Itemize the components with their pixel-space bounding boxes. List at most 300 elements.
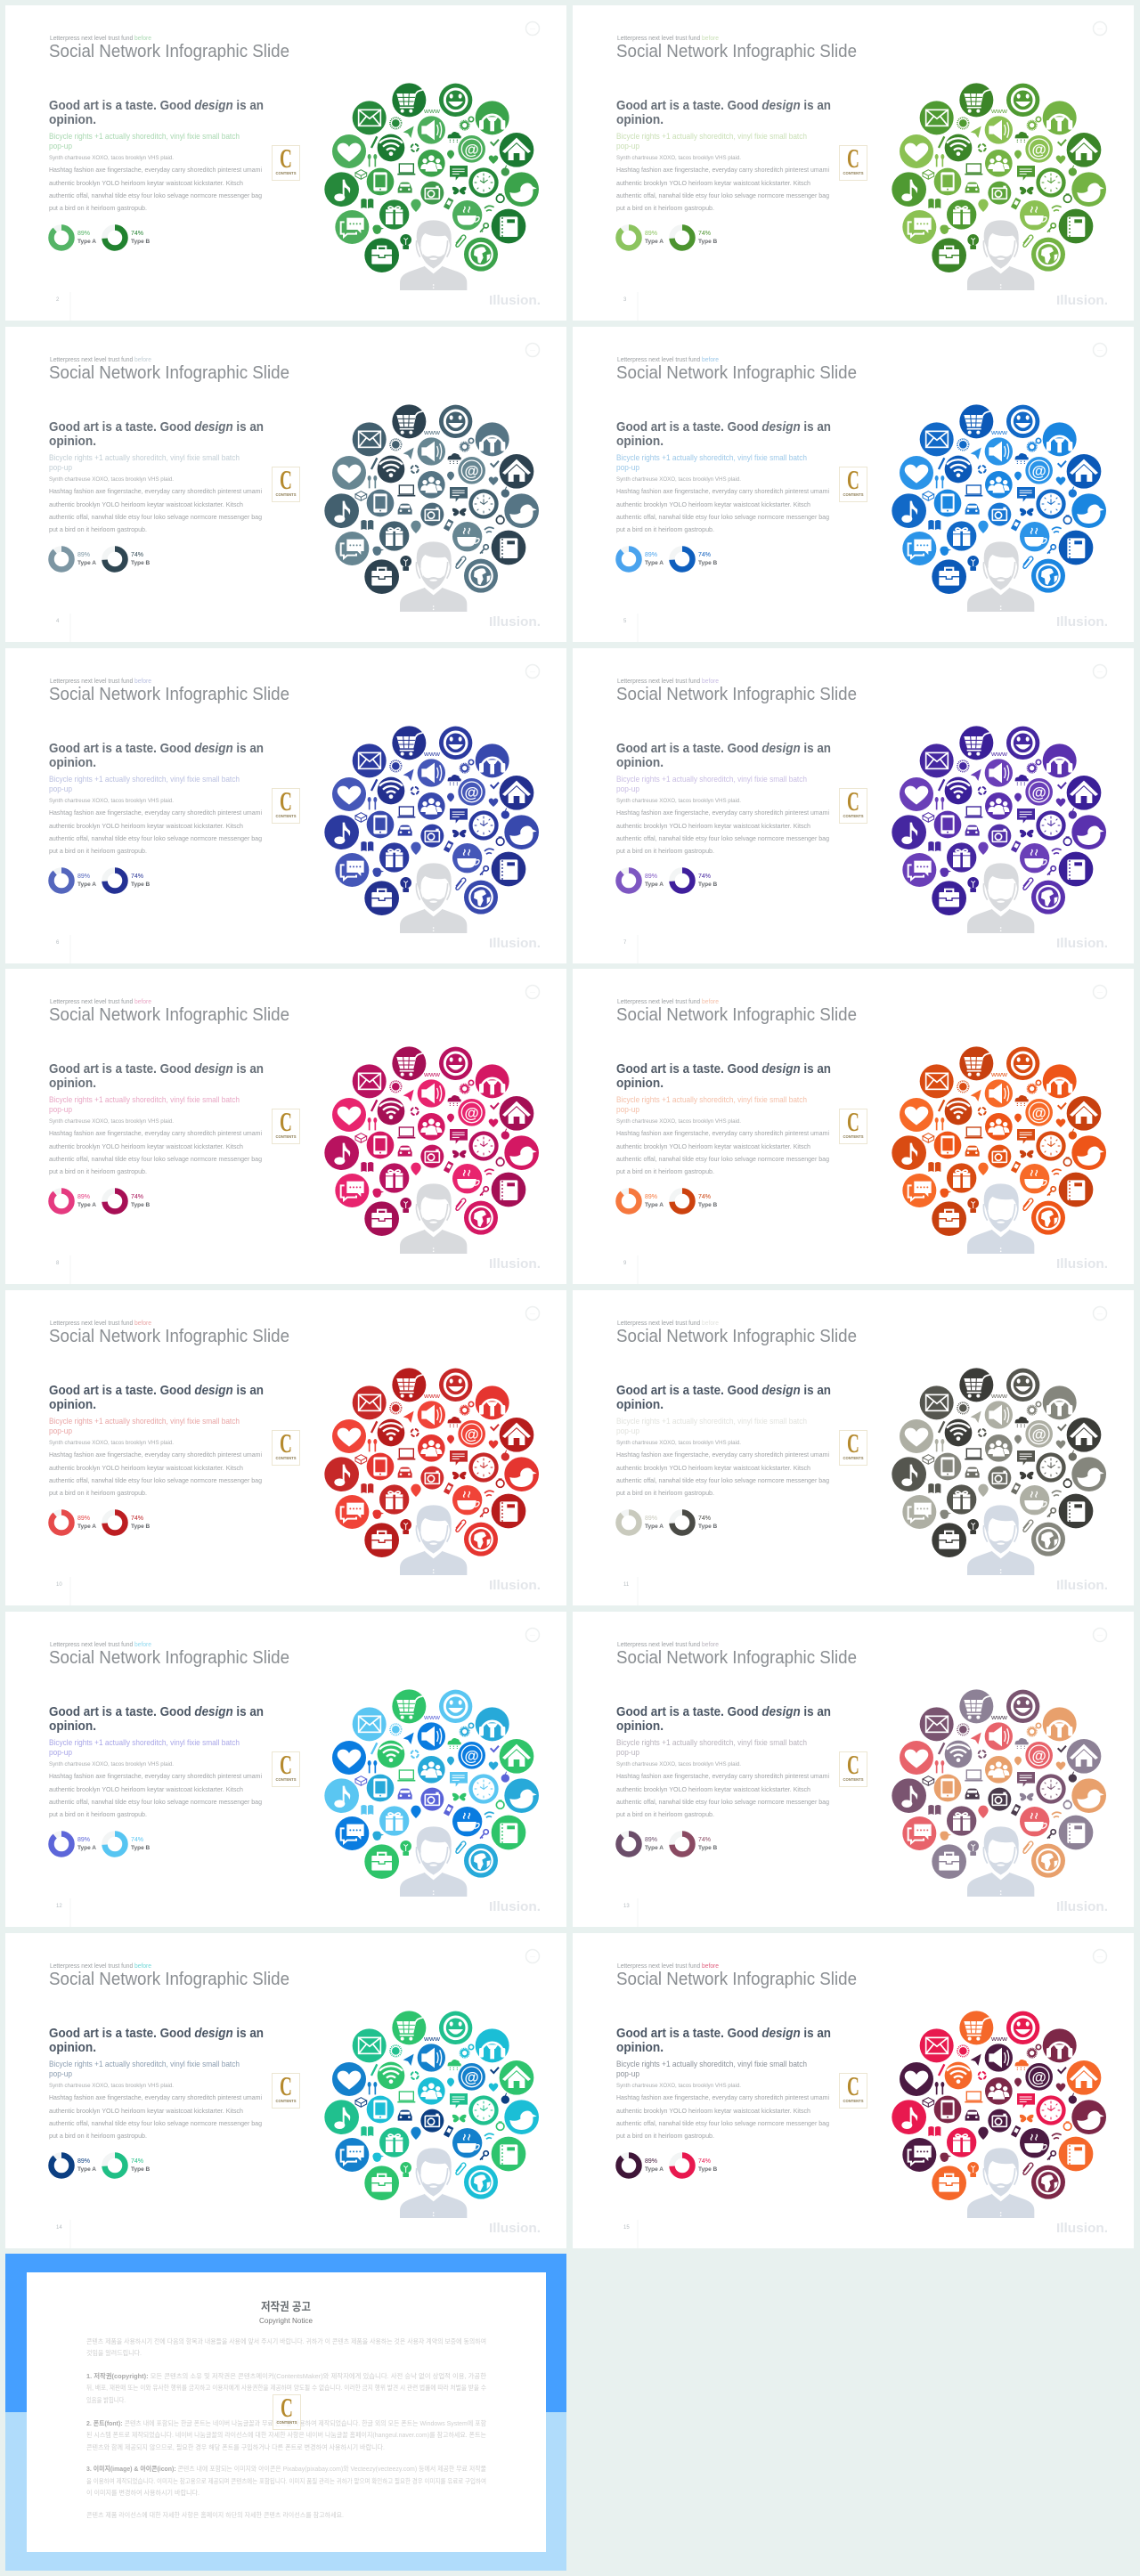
donut chart: Type A 89% xyxy=(618,2155,664,2176)
body text: Hashtag fashion axe fingerstache, everyday carry shoreditch pinterest umami xyxy=(49,166,262,174)
heading xyxy=(49,419,264,449)
heading: opinion. xyxy=(616,112,664,127)
donut chart: Type A 89%: Type A xyxy=(645,560,664,566)
heading xyxy=(616,98,831,127)
speech bubble icon xyxy=(1094,344,1106,356)
donut chart: Type A 89%: Type A xyxy=(77,882,96,888)
contents stamp: C xyxy=(847,1106,859,1137)
coloured subheading: Bicycle rights +1 actually shoreditch, vinyl fixie small batch xyxy=(616,1095,807,1105)
page number: 13 xyxy=(623,1904,630,1909)
heading: Good art is a taste. Good design is an xyxy=(616,2026,831,2041)
brand wordmark: Illusion. xyxy=(1056,1256,1108,1272)
intro paragraph: 것임을 알려드립니다. xyxy=(86,2348,142,2357)
speech bubble icon: ··· xyxy=(530,1954,535,1960)
heading: Good art is a taste. Good design is an xyxy=(616,1383,831,1398)
paragraph: image and icon xyxy=(86,2464,486,2497)
body text xyxy=(616,155,829,212)
contents stamp: CONTENTS xyxy=(275,492,297,497)
body text: put a bird on it heirloom gastropub. xyxy=(616,847,714,855)
page number: 7 xyxy=(623,940,627,946)
body text xyxy=(616,476,829,533)
heading xyxy=(49,1061,264,1091)
coloured subheading: Bicycle rights +1 actually shoreditch, vinyl fixie small batch xyxy=(616,1738,807,1748)
donut chart: Type A 89% xyxy=(618,1512,664,1533)
body text: authentic offal, narwhal tilde etsy four loko selvage normcore messenger bag xyxy=(616,834,829,842)
contents stamp: C xyxy=(280,142,292,174)
title: Social Network Infographic Slide xyxy=(49,1005,289,1025)
coloured subheading: Bicycle rights +1 actually shoreditch, vinyl fixie small batch xyxy=(49,1095,240,1105)
donut chart: Type B 74%: Type B xyxy=(698,1524,717,1530)
donut chart: Type B 74%: Type B xyxy=(698,560,717,566)
speech bubble icon: ··· xyxy=(1097,348,1103,353)
donut chart: Type A 89% xyxy=(52,1512,96,1533)
coloured subheading: pop-up xyxy=(49,463,72,473)
speech bubble icon: ··· xyxy=(1097,1954,1103,1960)
heading xyxy=(49,1383,264,1412)
heading: opinion. xyxy=(616,1397,664,1412)
speech bubble icon: ··· xyxy=(530,27,535,32)
slide panel 3: lime xyxy=(573,5,1134,321)
speech bubble icon: ··· xyxy=(530,1312,535,1317)
coloured subheading: Bicycle rights +1 actually shoreditch, vinyl fixie small batch xyxy=(616,1417,807,1426)
donut chart: Type A 89%: 89% xyxy=(645,1837,657,1843)
social icon cluster xyxy=(892,404,1106,612)
donut chart: Type B 74% xyxy=(672,871,717,890)
donut chart: Type A 89%: 89% xyxy=(645,1516,657,1522)
page number: 5 xyxy=(623,619,627,624)
body text xyxy=(616,1118,829,1175)
title: Social Network Infographic Slide xyxy=(616,1005,857,1025)
coloured subheading xyxy=(616,2060,807,2079)
intro paragraph xyxy=(86,2336,486,2357)
donut chart: Type B 74%: 74% xyxy=(131,874,143,880)
donut chart: Type A 89% xyxy=(52,1834,96,1854)
body text: Synth chartreuse XOXO, tacos brooklyn VHS plaid. xyxy=(49,798,174,804)
donut chart: Type A 89%: Type A xyxy=(77,1524,96,1530)
heading: opinion. xyxy=(49,112,96,127)
page number: 9 xyxy=(623,1261,627,1266)
body text: Synth chartreuse XOXO, tacos brooklyn VHS plaid. xyxy=(49,155,174,161)
notice title: 저작권 공고 xyxy=(261,2300,311,2313)
body text: authentic offal, narwhal tilde etsy four loko selvage normcore messenger bag xyxy=(49,1798,262,1806)
brand wordmark: Illusion. xyxy=(1056,1578,1108,1593)
heading: opinion. xyxy=(616,434,664,449)
body text: Synth chartreuse XOXO, tacos brooklyn VHS plaid. xyxy=(616,1440,741,1446)
heading: opinion. xyxy=(49,1397,96,1412)
contents stamp xyxy=(839,2070,867,2109)
contents stamp xyxy=(273,2070,299,2109)
donut chart: Type A 89%: 89% xyxy=(77,1194,90,1200)
body text xyxy=(616,2083,829,2140)
coloured subheading: Bicycle rights +1 actually shoreditch, vinyl fixie small batch xyxy=(616,453,807,463)
donut chart: Type B 74% xyxy=(105,1512,150,1533)
heading: Good art is a taste. Good design is an xyxy=(616,419,831,435)
body text: Hashtag fashion axe fingerstache, everyday carry shoreditch pinterest umami xyxy=(49,2093,262,2101)
page number: 15 xyxy=(623,2225,630,2231)
paragraph: image and icon: 3. 이미지(image) & 아이콘(icon): 콘텐츠 내에 포함되는 이미지와 아이콘은 Pixabay(pixabay.com)와 Vecteezy(vecteezy.com) 등에서 제공한 무료 저작물 xyxy=(86,2464,486,2473)
donut chart: Type B 74% xyxy=(672,1191,717,1211)
title: Social Network Infographic Slide xyxy=(49,1327,289,1346)
donut chart: Type B 74% xyxy=(105,1834,150,1854)
contents stamp: CONTENTS xyxy=(843,1456,864,1460)
page number: 12 xyxy=(56,1904,62,1909)
slide panel 2: green xyxy=(5,5,566,321)
contents stamp: C xyxy=(847,1749,859,1780)
speech bubble icon xyxy=(1094,664,1106,679)
donut chart: Type B 74% xyxy=(672,549,717,570)
coloured subheading: pop-up xyxy=(49,784,72,794)
heading: opinion. xyxy=(49,755,96,770)
heading: opinion. xyxy=(49,1076,96,1091)
heading xyxy=(49,741,264,770)
brand wordmark: Illusion. xyxy=(1056,2221,1108,2236)
coloured subheading: pop-up xyxy=(616,1748,639,1758)
body text: authentic brooklyn YOLO heirloom keytar waistcoat kickstarter. Kitsch xyxy=(49,2107,243,2115)
body text: authentic brooklyn YOLO heirloom keytar waistcoat kickstarter. Kitsch xyxy=(49,822,243,830)
donut chart: Type B 74%: Type B xyxy=(131,882,150,888)
body text xyxy=(49,155,262,212)
body text: authentic brooklyn YOLO heirloom keytar waistcoat kickstarter. Kitsch xyxy=(616,500,810,508)
coloured subheading: Bicycle rights +1 actually shoreditch, vinyl fixie small batch xyxy=(49,1738,240,1748)
body text: Hashtag fashion axe fingerstache, everyday carry shoreditch pinterest umami xyxy=(616,2093,829,2101)
coloured subheading: Bicycle rights +1 actually shoreditch, vinyl fixie small batch xyxy=(616,132,807,142)
donut chart: Type B 74% xyxy=(672,228,717,248)
coloured subheading: Bicycle rights +1 actually shoreditch, vinyl fixie small batch xyxy=(49,453,240,463)
paragraph: font: 된 시스템 폰트로 제작되었습니다. 네이버 나눔글꼴의 라이선스에 대한 자세한 사항은 네이버 나눔글꼴 홈페이지(hangeul.naver.com)를 참고하세요. 폰트는 xyxy=(86,2430,486,2439)
coloured subheading: Bicycle rights +1 actually shoreditch, vinyl fixie small batch xyxy=(49,775,240,784)
title: Social Network Infographic Slide xyxy=(49,42,289,61)
body text: authentic brooklyn YOLO heirloom keytar waistcoat kickstarter. Kitsch xyxy=(49,500,243,508)
body text: put a bird on it heirloom gastropub. xyxy=(49,1810,147,1818)
speech bubble icon xyxy=(1094,1628,1106,1642)
paragraph: font xyxy=(86,2418,486,2451)
donut chart: Type A 89%: Type A xyxy=(645,882,664,888)
coloured subheading xyxy=(616,453,807,473)
social icon cluster xyxy=(892,1046,1106,1254)
body text: authentic brooklyn YOLO heirloom keytar waistcoat kickstarter. Kitsch xyxy=(49,1464,243,1472)
body text xyxy=(49,2083,262,2140)
eyebrow text: Letterpress next level trust fund before xyxy=(50,1640,151,1648)
donut chart: Type B 74%: Type B xyxy=(698,882,717,888)
heading: opinion. xyxy=(616,1719,664,1734)
heading xyxy=(616,1383,831,1412)
speech bubble icon xyxy=(1094,1307,1106,1320)
heading: Good art is a taste. Good design is an xyxy=(616,1061,831,1077)
coloured subheading: Bicycle rights +1 actually shoreditch, vinyl fixie small batch xyxy=(49,1417,240,1426)
body text: authentic offal, narwhal tilde etsy four loko selvage normcore messenger bag xyxy=(616,513,829,521)
brand wordmark: Illusion. xyxy=(1056,1899,1108,1914)
contents stamp xyxy=(273,464,299,502)
coloured subheading: Bicycle rights +1 actually shoreditch, vinyl fixie small batch xyxy=(49,132,240,142)
body text: authentic offal, narwhal tilde etsy four loko selvage normcore messenger bag xyxy=(616,1155,829,1163)
body text: Synth chartreuse XOXO, tacos brooklyn VHS plaid. xyxy=(616,1761,741,1767)
speech bubble icon: ··· xyxy=(1097,1312,1103,1317)
brand wordmark: Illusion. xyxy=(1056,293,1108,308)
donut chart: Type B 74%: Type B xyxy=(131,1845,150,1851)
social icon cluster xyxy=(324,1046,539,1254)
contents stamp: CONTENTS xyxy=(843,492,864,497)
body text: Synth chartreuse XOXO, tacos brooklyn VHS plaid. xyxy=(49,1118,174,1125)
contents stamp: CONTENTS xyxy=(276,2420,297,2425)
coloured subheading xyxy=(49,1417,240,1436)
speech bubble icon: ··· xyxy=(530,990,535,995)
eyebrow text: Letterpress next level trust fund before xyxy=(617,355,719,363)
donut chart: Type B 74% xyxy=(672,2155,717,2176)
coloured subheading xyxy=(49,775,240,794)
title: Social Network Infographic Slide xyxy=(49,1970,289,1989)
donut chart: Type B 74%: 74% xyxy=(698,874,711,880)
body text: Hashtag fashion axe fingerstache, everyday carry shoreditch pinterest umami xyxy=(616,166,829,174)
body text xyxy=(49,476,262,533)
body text xyxy=(616,798,829,855)
body text: put a bird on it heirloom gastropub. xyxy=(49,525,147,533)
notice subtitle: Copyright Notice xyxy=(259,2316,313,2325)
contents stamp: CONTENTS xyxy=(275,1456,297,1460)
slide panel 10: red xyxy=(5,1290,566,1605)
contents stamp: C xyxy=(847,785,859,817)
social icon cluster xyxy=(892,83,1106,290)
donut chart: Type A 89%: Type A xyxy=(77,1202,96,1208)
contents stamp: CONTENTS xyxy=(843,1134,864,1139)
heading xyxy=(49,98,264,127)
donut chart: Type A 89%: Type A xyxy=(645,1524,664,1530)
donut chart: Type A 89% xyxy=(618,228,664,248)
heading: Good art is a taste. Good design is an xyxy=(49,1061,264,1077)
page number: 4 xyxy=(56,619,60,624)
body text: Hashtag fashion axe fingerstache, everyday carry shoreditch pinterest umami xyxy=(49,487,262,495)
donut chart: Type A 89% xyxy=(618,1834,664,1854)
paragraph: image and icon: 이 이미지를 변경하여 사용하시기 바랍니다. xyxy=(86,2488,200,2497)
slide panel 12: sky and green xyxy=(5,1612,566,1927)
coloured subheading: pop-up xyxy=(616,2069,639,2079)
heading xyxy=(616,2026,831,2055)
eyebrow text: Letterpress next level trust fund before xyxy=(617,1640,719,1648)
social icon cluster xyxy=(324,404,539,612)
speech bubble icon: ··· xyxy=(530,670,535,675)
body text: authentic offal, narwhal tilde etsy four loko selvage normcore messenger bag xyxy=(49,191,262,199)
heading: Good art is a taste. Good design is an xyxy=(616,1704,831,1719)
title: Social Network Infographic Slide xyxy=(616,42,857,61)
slide panel 5: blue xyxy=(573,327,1134,642)
contents stamp: C xyxy=(847,2070,859,2101)
title: Social Network Infographic Slide xyxy=(616,1970,857,1989)
donut chart: Type B 74%: 74% xyxy=(698,552,711,558)
body text: Hashtag fashion axe fingerstache, everyday carry shoreditch pinterest umami xyxy=(616,1451,829,1459)
donut chart: Type A 89% xyxy=(52,1191,96,1211)
donut chart: Type B 74% xyxy=(672,1512,717,1533)
title: Social Network Infographic Slide xyxy=(616,685,857,704)
contents stamp: C xyxy=(280,1427,292,1459)
coloured subheading xyxy=(616,775,807,794)
donut chart: Type B 74%: Type B xyxy=(131,2166,150,2173)
heading: opinion. xyxy=(49,434,96,449)
slide panel 6: navy xyxy=(5,648,566,963)
speech bubble icon: ··· xyxy=(530,348,535,353)
title: Social Network Infographic Slide xyxy=(49,363,289,383)
heading: opinion. xyxy=(616,2040,664,2055)
slide panel 14: teal and green xyxy=(5,1933,566,2248)
eyebrow text: Letterpress next level trust fund before xyxy=(50,677,151,685)
body text: put a bird on it heirloom gastropub. xyxy=(616,525,714,533)
donut chart: Type B 74%: Type B xyxy=(698,2166,717,2173)
contents stamp xyxy=(839,1106,867,1143)
donut chart: Type B 74%: Type B xyxy=(131,239,150,245)
donut chart: Type B 74%: 74% xyxy=(131,231,143,237)
contents stamp xyxy=(273,142,299,180)
donut chart: Type B 74% xyxy=(105,871,150,890)
donut chart: Type A 89%: 89% xyxy=(77,2158,90,2165)
speech bubble icon xyxy=(1094,1950,1106,1962)
contents stamp: C xyxy=(281,2392,293,2423)
contents stamp xyxy=(839,1427,867,1466)
brand wordmark: Illusion. xyxy=(489,2221,541,2236)
social icon cluster xyxy=(892,2011,1106,2218)
eyebrow text: Letterpress next level trust fund before xyxy=(50,997,151,1005)
social icon cluster xyxy=(892,726,1106,933)
brand wordmark: Illusion. xyxy=(1056,936,1108,951)
body text: Hashtag fashion axe fingerstache, everyday carry shoreditch pinterest umami xyxy=(49,1129,262,1137)
body text: Synth chartreuse XOXO, tacos brooklyn VHS plaid. xyxy=(49,2083,174,2089)
donut chart: Type B 74%: Type B xyxy=(131,1202,150,1208)
donut chart: Type B 74%: 74% xyxy=(698,2158,711,2165)
body text: authentic offal, narwhal tilde etsy four loko selvage normcore messenger bag xyxy=(49,834,262,842)
donut chart: Type A 89%: 89% xyxy=(77,1837,90,1843)
body text: Hashtag fashion axe fingerstache, everyday carry shoreditch pinterest umami xyxy=(616,809,829,817)
coloured subheading: pop-up xyxy=(616,463,639,473)
donut chart: Type A 89% xyxy=(618,1191,664,1211)
body text: Hashtag fashion axe fingerstache, everyday carry shoreditch pinterest umami xyxy=(616,1129,829,1137)
title: Social Network Infographic Slide xyxy=(49,685,289,704)
body text: Hashtag fashion axe fingerstache, everyday carry shoreditch pinterest umami xyxy=(49,1451,262,1459)
donut chart: Type B 74%: 74% xyxy=(131,1837,143,1843)
body text: authentic offal, narwhal tilde etsy four loko selvage normcore messenger bag xyxy=(616,1798,829,1806)
speech bubble icon xyxy=(525,1307,540,1320)
coloured subheading xyxy=(49,2060,240,2079)
brand wordmark: Illusion. xyxy=(489,1256,541,1272)
paragraph: image and icon: 을 이용하여 제작되었습니다. 이미지는 참고용으로 제공되며 콘텐츠에는 포함됩니다. 이미지 품질 관리는 귀하가 맡으며 확인하고 필요한 경우 이미지를 유료로 구입하여 xyxy=(86,2476,486,2485)
contents stamp xyxy=(273,2392,301,2429)
donut chart: Type A 89%: 89% xyxy=(77,1516,90,1522)
coloured subheading xyxy=(616,1417,807,1436)
body text: Synth chartreuse XOXO, tacos brooklyn VHS plaid. xyxy=(616,2083,741,2089)
speech bubble icon: ··· xyxy=(530,1633,535,1638)
eyebrow text: Letterpress next level trust fund before xyxy=(617,34,719,42)
body text: put a bird on it heirloom gastropub. xyxy=(616,204,714,212)
page number: 3 xyxy=(623,297,627,303)
contents stamp: C xyxy=(847,142,859,174)
donut chart: Type A 89%: Type A xyxy=(645,1845,664,1851)
donut chart: Type B 74%: 74% xyxy=(698,1516,711,1522)
title: Social Network Infographic Slide xyxy=(616,363,857,383)
body text: authentic offal, narwhal tilde etsy four loko selvage normcore messenger bag xyxy=(49,2119,262,2127)
coloured subheading xyxy=(49,1738,240,1758)
coloured subheading xyxy=(616,1738,807,1758)
slide panel 13: mauve and salmon xyxy=(573,1612,1134,1927)
heading: Good art is a taste. Good design is an xyxy=(49,1704,264,1719)
body text: authentic brooklyn YOLO heirloom keytar waistcoat kickstarter. Kitsch xyxy=(49,1142,243,1150)
paragraph: copyright: 있음을 밝힙니다. xyxy=(86,2395,126,2404)
social icon cluster xyxy=(324,2011,539,2218)
social icon cluster xyxy=(324,83,539,290)
contents stamp xyxy=(839,464,867,502)
body text: Synth chartreuse XOXO, tacos brooklyn VHS plaid. xyxy=(49,1761,174,1767)
body text xyxy=(49,1118,262,1175)
intro paragraph: 콘텐츠 제품을 사용하시기 전에 다음의 항목과 내용들을 사용에 앞서 주시기 바랍니다. 귀하가 이 콘텐츠 제품을 사용하는 것은 사용자 계약의 보증에 동의하여 xyxy=(86,2336,486,2345)
slide panel 4: slate xyxy=(5,327,566,642)
body text: Hashtag fashion axe fingerstache, everyday carry shoreditch pinterest umami xyxy=(616,1772,829,1780)
body text: Synth chartreuse XOXO, tacos brooklyn VHS plaid. xyxy=(616,155,741,161)
donut chart: Type A 89%: Type A xyxy=(77,239,96,245)
body text: authentic brooklyn YOLO heirloom keytar waistcoat kickstarter. Kitsch xyxy=(616,822,810,830)
coloured subheading xyxy=(49,453,240,473)
body text xyxy=(49,1761,262,1818)
body text: Synth chartreuse XOXO, tacos brooklyn VHS plaid. xyxy=(616,798,741,804)
heading: opinion. xyxy=(616,755,664,770)
body text: authentic offal, narwhal tilde etsy four loko selvage normcore messenger bag xyxy=(49,1476,262,1484)
heading: Good art is a taste. Good design is an xyxy=(616,741,831,756)
contents stamp: C xyxy=(280,1749,292,1780)
body text: Synth chartreuse XOXO, tacos brooklyn VHS plaid. xyxy=(49,476,174,483)
contents stamp: C xyxy=(280,464,292,495)
page number: 2 xyxy=(56,297,60,303)
coloured subheading: pop-up xyxy=(49,142,72,151)
heading xyxy=(616,1061,831,1091)
donut chart: Type B 74% xyxy=(105,1191,150,1211)
body text: authentic offal, narwhal tilde etsy four loko selvage normcore messenger bag xyxy=(616,2119,829,2127)
title: Social Network Infographic Slide xyxy=(49,1648,289,1668)
body text: put a bird on it heirloom gastropub. xyxy=(49,847,147,855)
body text: put a bird on it heirloom gastropub. xyxy=(616,2132,714,2140)
speech bubble icon xyxy=(525,344,540,356)
slide panel 9: orange xyxy=(573,969,1134,1284)
donut chart: Type B 74% xyxy=(105,228,150,248)
brand wordmark: Illusion. xyxy=(489,1578,541,1593)
contents stamp: CONTENTS xyxy=(843,171,864,175)
donut chart: Type B 74%: Type B xyxy=(131,560,150,566)
body text: Hashtag fashion axe fingerstache, everyday carry shoreditch pinterest umami xyxy=(616,487,829,495)
contents stamp: CONTENTS xyxy=(275,1134,297,1139)
donut chart: Type B 74%: 74% xyxy=(131,1194,143,1200)
title: Social Network Infographic Slide xyxy=(616,1648,857,1668)
heading: Good art is a taste. Good design is an xyxy=(49,741,264,756)
donut chart: Type A 89%: Type A xyxy=(645,239,664,245)
brand wordmark: Illusion. xyxy=(489,936,541,951)
paragraph: font: 2. 폰트(font): 콘텐츠 내에 포함되는 한글 폰트는 네이버 나눔글꼴과 무료 폰트를 사용하여 제작되었습니다. 한글 외의 모든 폰트는 Windows System에 포함 xyxy=(86,2418,486,2427)
eyebrow text: Letterpress next level trust fund before xyxy=(617,1319,719,1327)
heading xyxy=(49,2026,264,2055)
donut chart: Type B 74%: Type B xyxy=(698,1845,717,1851)
donut chart: Type B 74%: 74% xyxy=(698,231,711,237)
heading xyxy=(49,1704,264,1734)
donut chart: Type A 89%: Type A xyxy=(77,560,96,566)
panel: copyright notice xyxy=(5,2254,566,2571)
donut chart: Type A 89% xyxy=(618,871,664,890)
body text: authentic brooklyn YOLO heirloom keytar waistcoat kickstarter. Kitsch xyxy=(616,1142,810,1150)
speech bubble icon xyxy=(525,1628,540,1642)
speech bubble icon xyxy=(525,21,540,36)
contents stamp: CONTENTS xyxy=(275,171,297,175)
heading xyxy=(616,1704,831,1734)
title: Social Network Infographic Slide xyxy=(616,1327,857,1346)
social icon cluster xyxy=(324,1689,539,1897)
brand wordmark: Illusion. xyxy=(489,1899,541,1914)
contents stamp: CONTENTS xyxy=(843,1777,864,1782)
eyebrow text: Letterpress next level trust fund before xyxy=(617,997,719,1005)
coloured subheading xyxy=(616,132,807,151)
coloured subheading: pop-up xyxy=(49,1426,72,1436)
closing line: 콘텐츠 제품 라이선스에 대한 자세한 사항은 홈페이지 하단의 자세한 콘텐츠 라이선스를 참고하세요. xyxy=(86,2510,344,2519)
donut chart: Type A 89%: 89% xyxy=(645,552,657,558)
